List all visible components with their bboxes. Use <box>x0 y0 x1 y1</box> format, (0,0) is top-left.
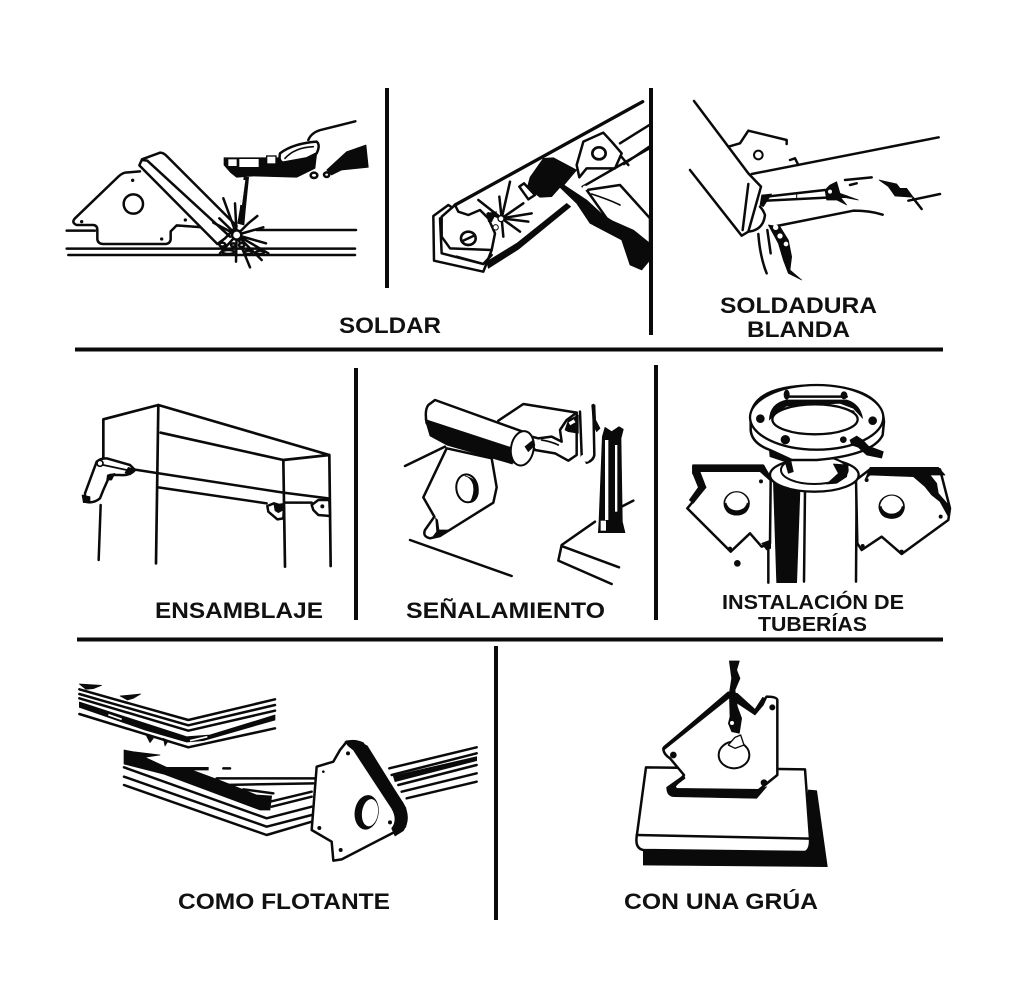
illustration: marking with magnet and scribing <box>405 400 633 584</box>
label: INSTALACIÓN DE TUBERÍAS: TUBERÍAS <box>758 613 867 636</box>
illustration: welding the corner of an angle profile <box>433 102 650 272</box>
illustration: frame assembly with corner magnets <box>82 405 331 567</box>
label: SEÑALAMIENTO: SEÑALAMIENTO <box>406 598 605 623</box>
panel: instalación de tuberías <box>687 385 950 636</box>
illustration: pipe flange with two magnets <box>687 385 950 583</box>
label: INSTALACIÓN DE TUBERÍAS: INSTALACIÓN DE <box>722 590 904 614</box>
panel: señalamiento <box>405 400 633 623</box>
illustration: soft soldering a frame <box>690 101 940 280</box>
illustration: welding torch on magnet <box>67 121 368 267</box>
label: INSTALACIÓN DE TUBERÍAS <box>722 590 904 636</box>
label: SOLDADURA BLANDA <box>720 293 877 342</box>
panel: soldadura blanda <box>690 101 940 342</box>
illustration: floating steel sheets with magnet <box>79 684 477 861</box>
illustration: lifting a plate with a crane hook <box>636 661 827 867</box>
label: SOLDADURA BLANDA: BLANDA <box>747 317 850 342</box>
label: ENSAMBLAJE: ENSAMBLAJE <box>155 598 323 623</box>
panel: soldar en esquina <box>433 102 650 272</box>
panel: con una grúa <box>624 661 827 914</box>
label: SOLDADURA BLANDA: SOLDADURA <box>720 293 877 318</box>
panel: soldar <box>67 121 441 338</box>
label: COMO FLOTANTE: COMO FLOTANTE <box>178 889 390 914</box>
panel: ensamblaje <box>82 405 331 623</box>
label: CON UNA GRÚA: CON UNA GRÚA <box>624 889 818 914</box>
panel: como flotante <box>79 684 477 914</box>
label: SOLDAR: SOLDAR <box>339 313 441 338</box>
